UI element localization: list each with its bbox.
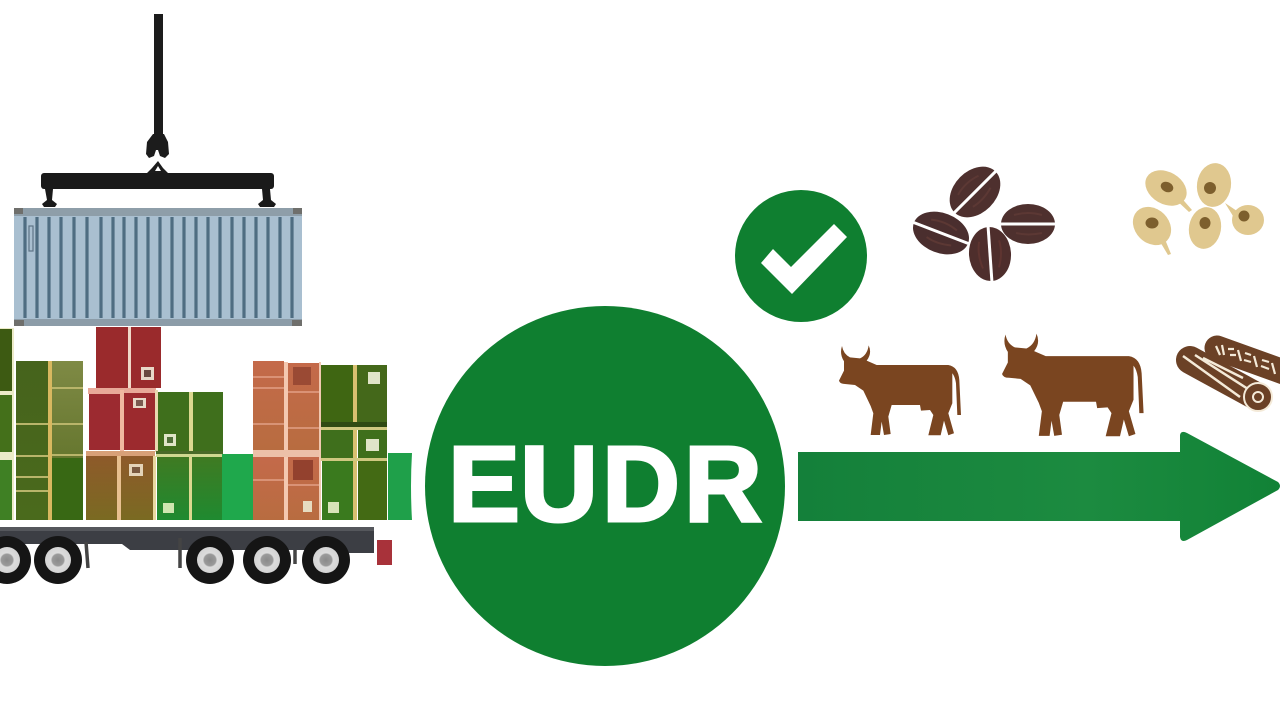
shipping container [14,208,302,326]
wheels [0,536,350,584]
icon: cow right [1002,334,1144,436]
icon: coffee beans [906,156,1058,283]
red middle containers [88,388,156,452]
left partial stack [0,328,14,520]
right green arrow [798,432,1280,541]
red top containers [96,327,161,388]
icon: logs [1183,345,1280,411]
cargo stacks [0,327,387,520]
truck trailer [0,527,392,584]
spreader beam [41,173,276,207]
arrow stub behind EUDR circle [388,453,412,520]
orange containers [253,361,321,520]
bright green block [222,454,253,520]
olive stack [16,361,83,520]
icon: cow left [839,345,961,435]
crane rope and hook [146,14,169,173]
green centre containers [155,390,223,520]
EUDR circle [425,306,785,666]
brown lower containers [86,451,156,520]
icon: check badge [735,190,867,322]
EUDR label: EUDR [448,423,762,544]
green right containers [321,365,387,520]
icon: soybeans [1125,161,1264,255]
